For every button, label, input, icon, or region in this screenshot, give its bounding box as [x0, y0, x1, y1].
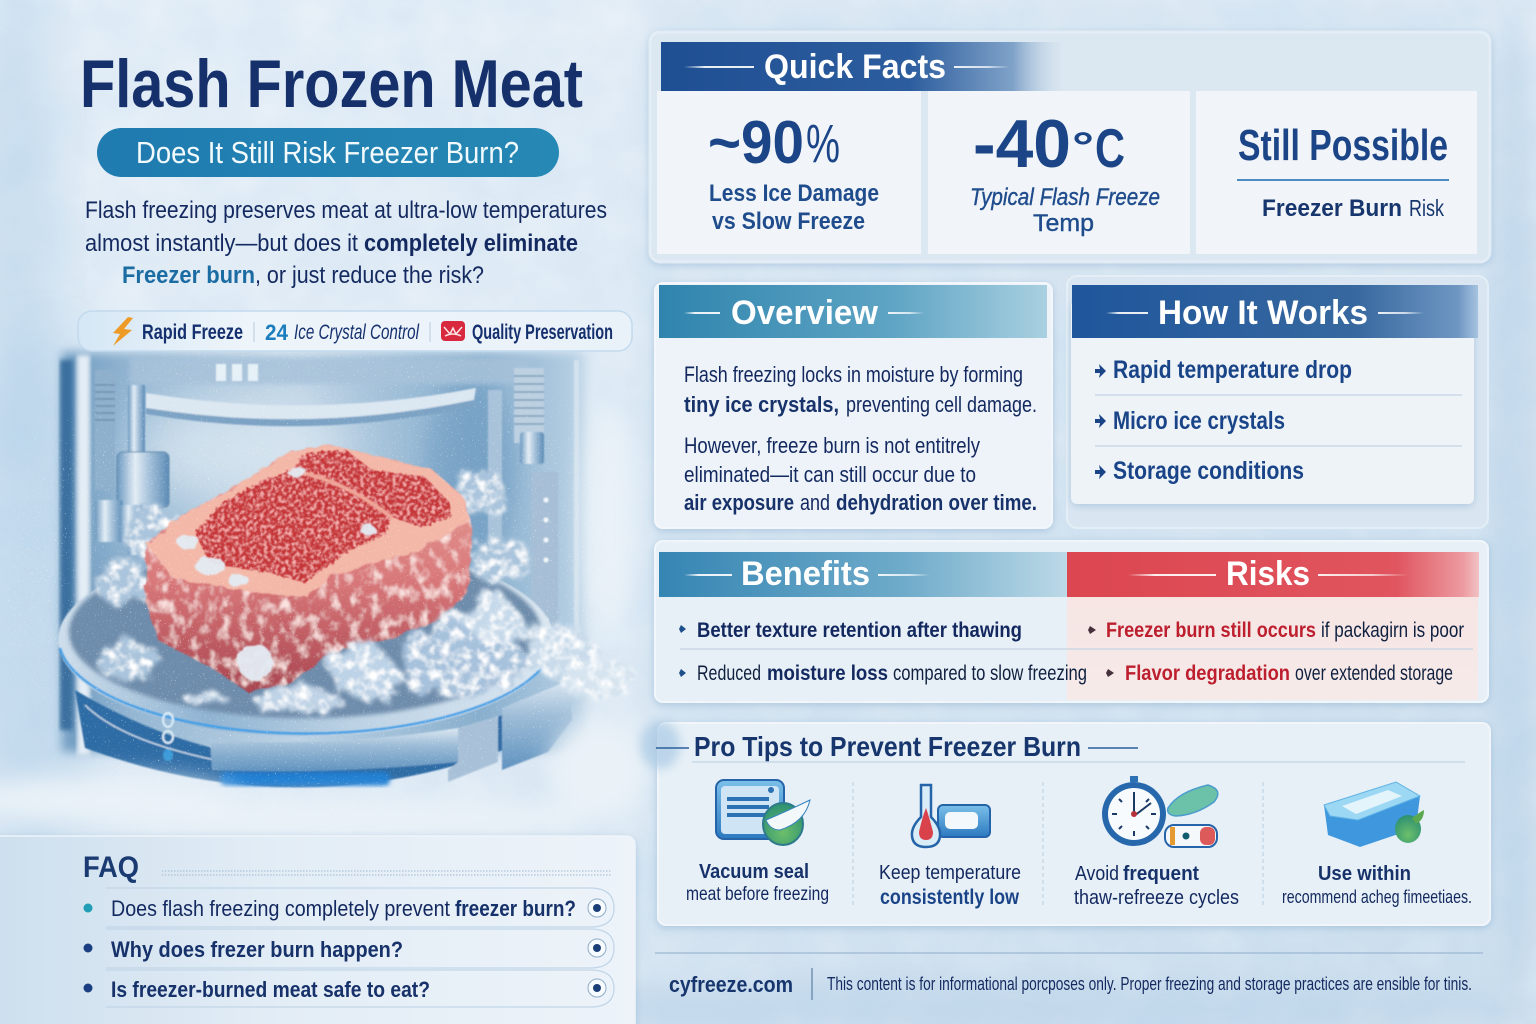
quick facts header: [661, 42, 1061, 91]
panel: pro tips: [640, 721, 1490, 925]
tip 1: vacuum seal: [686, 780, 829, 905]
overview text: [684, 362, 1037, 515]
risks header: [1067, 552, 1479, 597]
fact card risk: [1196, 91, 1477, 254]
panel: benefits and risks: [655, 541, 1488, 702]
tip 3: avoid thaw refreeze: Avoid: [1075, 863, 1119, 885]
fact card temperature: -40: [973, 106, 1071, 182]
fact card 90 percent: vs Slow Freeze: [712, 208, 865, 235]
intro paragraph: Freezer burn: [122, 262, 255, 289]
subtitle pill: [97, 128, 559, 177]
FAQ question 1: freezer burn?: [455, 896, 576, 921]
benefits header: [659, 552, 1067, 597]
quick facts header: Quick Facts: [764, 48, 946, 86]
fact card temperature: Typical Flash Freeze: [970, 184, 1160, 211]
how it works steps: [1113, 356, 1352, 485]
overview text: and: [800, 490, 830, 515]
feature chips bar: [78, 311, 632, 351]
overview text: eliminated—it can still occur due to: [684, 462, 976, 487]
hero image: flash freezer chamber with meat: [0, 346, 652, 835]
meat steak: [145, 445, 472, 692]
icon: lightning: [113, 317, 133, 346]
panel: how it works: [1067, 276, 1488, 528]
overview text: air exposure: [684, 490, 794, 515]
risks list: over extended storage: [1295, 662, 1453, 685]
fact card temperature: °: [1072, 125, 1094, 169]
how it works steps: Storage conditions: [1113, 457, 1304, 485]
subtitle pill: Does It Still Risk Freezer Burn?: [136, 135, 519, 170]
tip 3: avoid thaw refreeze: frequent: [1123, 863, 1199, 885]
tip 2: keep temperature low: [879, 785, 1021, 909]
fact card temperature: Temp: [1033, 210, 1094, 237]
how it works steps: Micro ice crystals: [1113, 407, 1285, 435]
overview text: However, freeze burn is not entitrely: [684, 433, 980, 458]
left pillars: [60, 355, 169, 755]
footer: cyfreeze.com: [669, 972, 793, 997]
snow drift: [0, 400, 650, 838]
risks list: if packagirn is poor: [1321, 619, 1464, 642]
benefits list: compared to slow freezing: [893, 662, 1087, 685]
icon: clock and pills: [1102, 776, 1218, 847]
tip 1: vacuum seal: meat before freezing: [686, 884, 829, 905]
platform floor: [69, 546, 541, 718]
fact card 90 percent: %: [806, 114, 840, 174]
risks list: Freezer burn still occurs: [1106, 619, 1316, 642]
tip 3: avoid thaw refreeze: [1074, 776, 1239, 909]
icon: vacuum pack: [716, 780, 810, 845]
chamber top arch: [130, 358, 530, 426]
icon: quality: [441, 321, 465, 341]
FAQ question 1: Does flash freezing completely prevent: [111, 896, 450, 921]
FAQ question 2: [84, 929, 614, 968]
footer: [655, 953, 1483, 1000]
fact card risk: Risk: [1409, 195, 1444, 221]
ice chunks front of meat: [183, 590, 638, 712]
title: Flash Frozen Meat: [80, 46, 583, 122]
ice behind meat: [96, 468, 530, 680]
intro paragraph: completely eliminate: [364, 230, 578, 257]
fact card 90 percent: Less Ice Damage: [709, 180, 879, 207]
fact card risk: Freezer Burn: [1262, 195, 1402, 222]
feature chips bar: 24: [265, 320, 289, 345]
fact card risk: Still Possible: [1238, 121, 1448, 170]
feature chips bar: Ice Crystal Control: [294, 321, 420, 344]
pro tips heading: Pro Tips to Prevent Freezer Burn: [694, 731, 1081, 762]
FAQ question 3: Is freezer-burned meat safe to eat?: [111, 977, 430, 1002]
feature chips bar: Rapid Freeze: [142, 321, 243, 344]
benefits list: Reduced: [697, 662, 761, 685]
fact card 90 percent: ~90: [708, 109, 804, 176]
intro paragraph: Flash freezing preserves meat at ultra-low temperatures: [85, 197, 607, 224]
tip 4: use within: recommend acheg fimeetiaes.: [1282, 887, 1472, 907]
benefits list: [679, 619, 1087, 685]
how it works steps: Rapid temperature drop: [1113, 356, 1352, 384]
tip 1: vacuum seal: Vacuum seal: [699, 861, 809, 883]
tip 4: use within: Use within: [1318, 863, 1411, 885]
overview text: tiny ice crystals,: [684, 392, 839, 417]
benefits header: Benefits: [741, 555, 870, 593]
tip 4: use within: [1282, 782, 1472, 907]
panel: FAQ: FAQ: [83, 851, 139, 884]
tip 2: keep temperature low: Keep temperature: [879, 862, 1021, 884]
benefits list: Better texture retention after thawing: [697, 619, 1022, 642]
FAQ question 1: [84, 888, 614, 927]
falling snow specks: [0, 352, 630, 820]
fact card temperature: [928, 91, 1190, 254]
panel: overview: [655, 283, 1052, 528]
fact card 90 percent: [657, 91, 921, 254]
feature chips bar: Quality Preservation: [472, 321, 613, 344]
overview text: Flash freezing locks in moisture by forming: [684, 362, 1023, 387]
FAQ question 3: [84, 970, 614, 1007]
panel: how it works: How It Works: [1158, 294, 1368, 332]
intro paragraph: [85, 197, 607, 289]
chamber interior: [62, 352, 587, 752]
intro paragraph: , or just reduce the risk?: [255, 262, 484, 289]
panel: FAQ: [0, 836, 635, 1024]
intro paragraph: almost instantly—but does it: [85, 230, 358, 257]
tip 2: keep temperature low: consistently low: [880, 886, 1020, 909]
overview text: preventing cell damage.: [846, 392, 1037, 417]
panel: overview: Overview: [731, 294, 879, 332]
platform base: [58, 544, 572, 787]
risks list: [1088, 619, 1464, 685]
FAQ question 2: Why does frezer burn happen?: [111, 937, 403, 962]
icon: storage box with leaf: [1324, 782, 1424, 847]
risks header: Risks: [1226, 555, 1310, 593]
risks list: Flavor degradation: [1125, 662, 1290, 685]
fact card temperature: C: [1095, 117, 1125, 179]
tip 3: avoid thaw refreeze: thaw-refreeze cycles: [1074, 887, 1239, 909]
panel: quick facts: [650, 32, 1490, 262]
benefits list: moisture loss: [767, 662, 888, 685]
right pillars and screw: [488, 360, 579, 662]
overview text: dehydration over time.: [836, 490, 1037, 515]
icon: thermometer and pack: [912, 785, 990, 847]
